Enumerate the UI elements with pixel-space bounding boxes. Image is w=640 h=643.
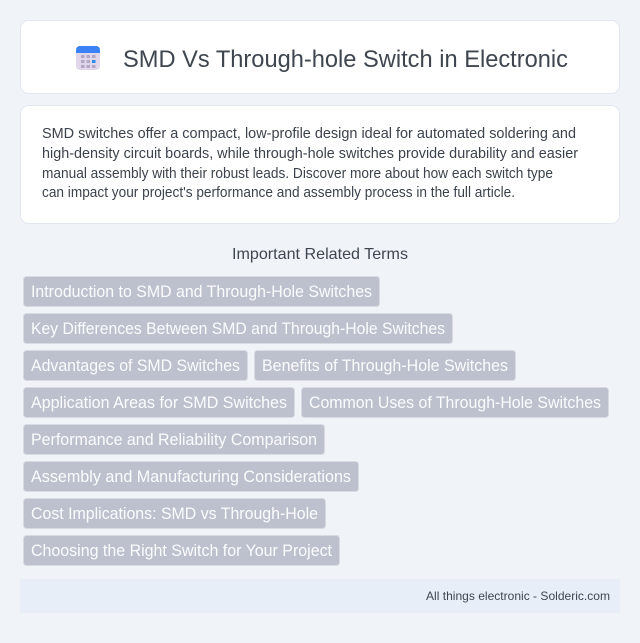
panel: related term tags [24,276,608,566]
tag: benefits of through-hole [254,350,516,380]
heading: important related terms: Important Related Terms [232,246,408,263]
panel: header card [20,20,620,94]
tag: assembly [24,462,358,492]
text block: summary paragraph: can impact your project's performance and assembly process in the full article. [42,185,515,201]
tag: common uses [302,388,608,418]
text block: summary paragraph: SMD switches offer a compact, low-profile design ideal for automated soldering and [42,126,576,142]
title: SMD Vs Through-hole Switch in Electronic [123,46,568,73]
tag: application areas [24,388,294,418]
tag: choosing: Choosing the Right Switch for Your Project [31,542,332,560]
tag: introduction: Introduction to SMD and Through-Hole Switches [31,283,372,301]
text block: summary paragraph: high-density circuit boards, while through-hole switches provide durability and easier [42,146,578,162]
tag: assembly: Assembly and Manufacturing Considerations [31,468,351,486]
tag: advantages of SMD: Advantages of SMD Switches [31,357,240,375]
tag: cost: Cost Implications: SMD vs Through-Hole [31,505,318,523]
icon: calendar grid [76,46,100,70]
tag: advantages of SMD [24,350,248,380]
tag: key differences [24,314,452,344]
text block: summary paragraph [42,126,578,201]
footer [20,579,620,613]
panel: summary card [20,106,620,224]
tag: introduction [24,276,380,306]
footer: All things electronic - Solderic.com [426,589,610,603]
tag: cost [24,498,326,528]
tag: key differences: Key Differences Between SMD and Through-Hole Switches [31,320,445,338]
tag: performance: Performance and Reliability Comparison [31,431,317,449]
tag: benefits of through-hole: Benefits of Through-Hole Switches [262,357,508,375]
tag: choosing [24,536,340,566]
tag: common uses: Common Uses of Through-Hole Switches [309,394,601,412]
tag: application areas: Application Areas for SMD Switches [31,394,287,412]
tag: performance [24,424,324,454]
text block: summary paragraph: manual assembly with their robust leads. Discover more about how each switch type [42,166,553,182]
